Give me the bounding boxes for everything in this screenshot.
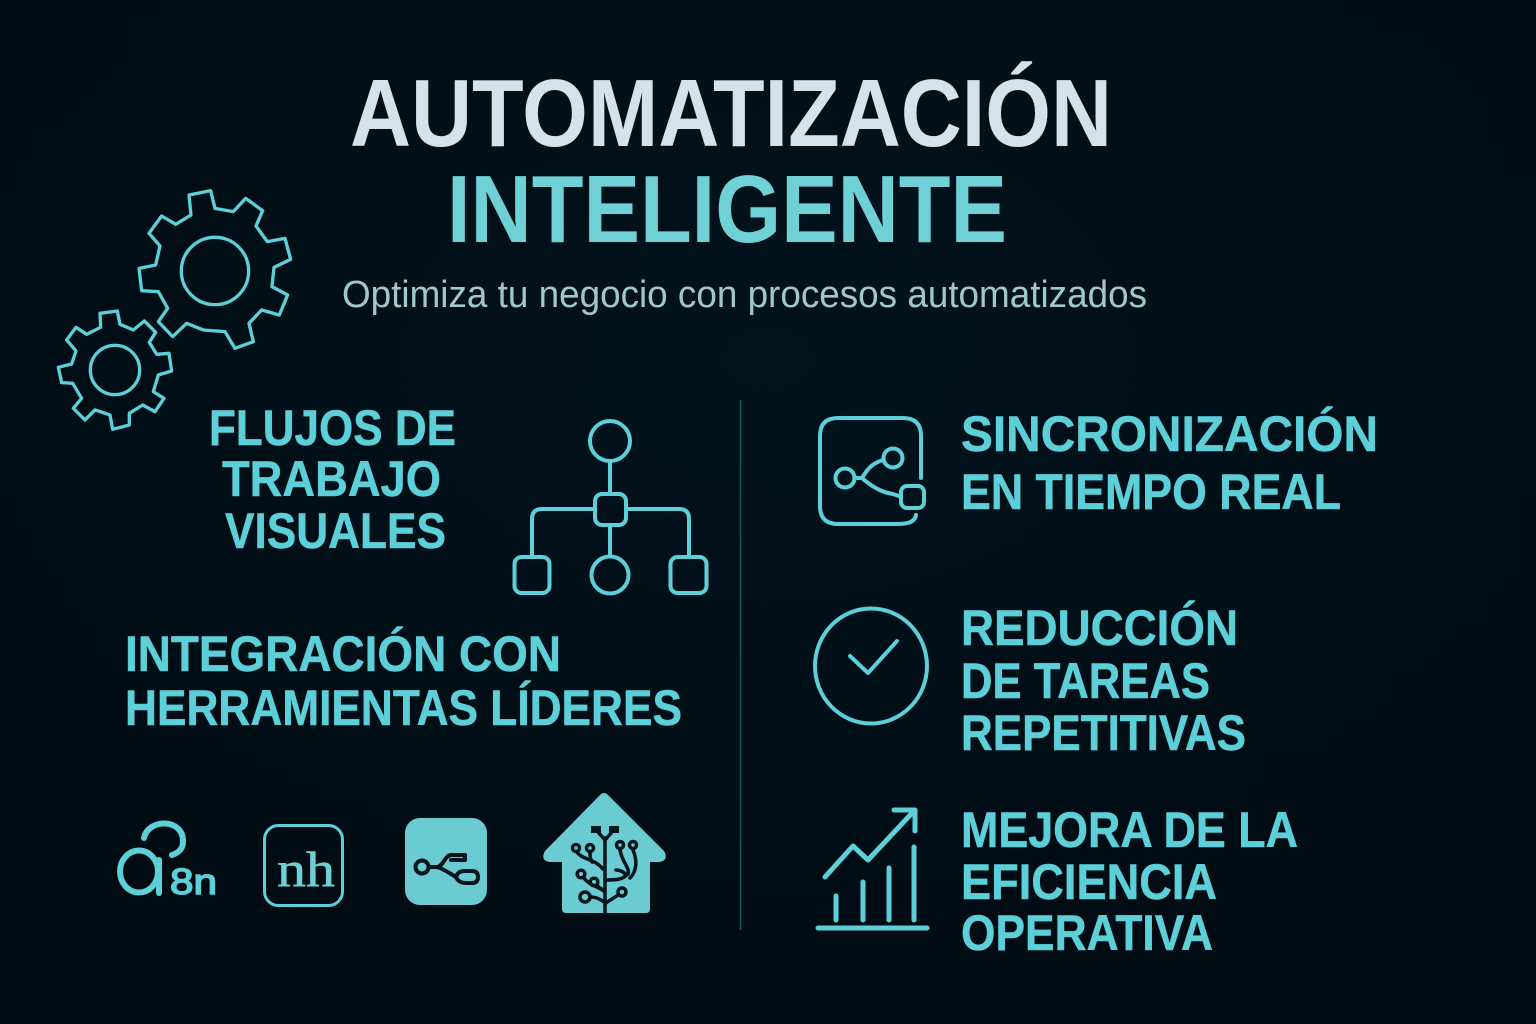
panel: mejora heading: MEJORA DE LA: [961, 802, 1298, 858]
icon: gears: [58, 191, 291, 429]
panel: mejora heading: [961, 802, 1298, 961]
title line 1: AUTOMATIZACIÓN: [350, 60, 1112, 167]
divider: [740, 400, 742, 930]
panel: mejora heading: OPERATIVA: [961, 905, 1213, 961]
panel: flujos de trabajo visuales heading: FLUJOS DE: [209, 400, 456, 456]
panel: integración heading: [125, 626, 682, 736]
panel: flujos de trabajo visuales heading: VISUALES: [225, 503, 446, 559]
panel: sincronización heading: SINCRONIZACIÓN: [961, 406, 1378, 462]
panel: flujos de trabajo visuales heading: TRABAJO: [222, 451, 441, 507]
panel: sincronización heading: [961, 406, 1378, 520]
icon: home assistant logo: [543, 793, 666, 913]
icon: n8n logo: [120, 823, 217, 902]
panel: integración heading: INTEGRACIÓN CON: [125, 626, 561, 682]
icon: sync flow: [820, 418, 924, 524]
icon: workflow diagram: [514, 421, 706, 594]
title: [350, 60, 1112, 263]
subtitle: Optimiza tu negocio con procesos automatizados: [342, 274, 1147, 316]
panel: reducción heading: DE TAREAS: [961, 653, 1210, 709]
panel: reducción heading: REDUCCIÓN: [961, 600, 1238, 656]
panel: reducción heading: [961, 600, 1246, 761]
title line 2: INTELIGENTE: [447, 156, 1007, 263]
icon: n8n logo: 8n: [170, 861, 217, 902]
icon: growth chart: [818, 810, 927, 928]
icon: nh logo: [264, 826, 342, 906]
icon: nh logo: nh: [277, 841, 335, 897]
panel: mejora heading: EFICIENCIA: [961, 854, 1217, 910]
panel: sincronización heading: EN TIEMPO REAL: [961, 464, 1341, 520]
panel: integración heading: HERRAMIENTAS LÍDERES: [125, 680, 682, 736]
panel: reducción heading: REPETITIVAS: [961, 705, 1246, 761]
panel: flujos de trabajo visuales heading: [209, 400, 456, 559]
icon: check circle: [815, 608, 927, 724]
icon: node-red logo: [405, 818, 487, 905]
